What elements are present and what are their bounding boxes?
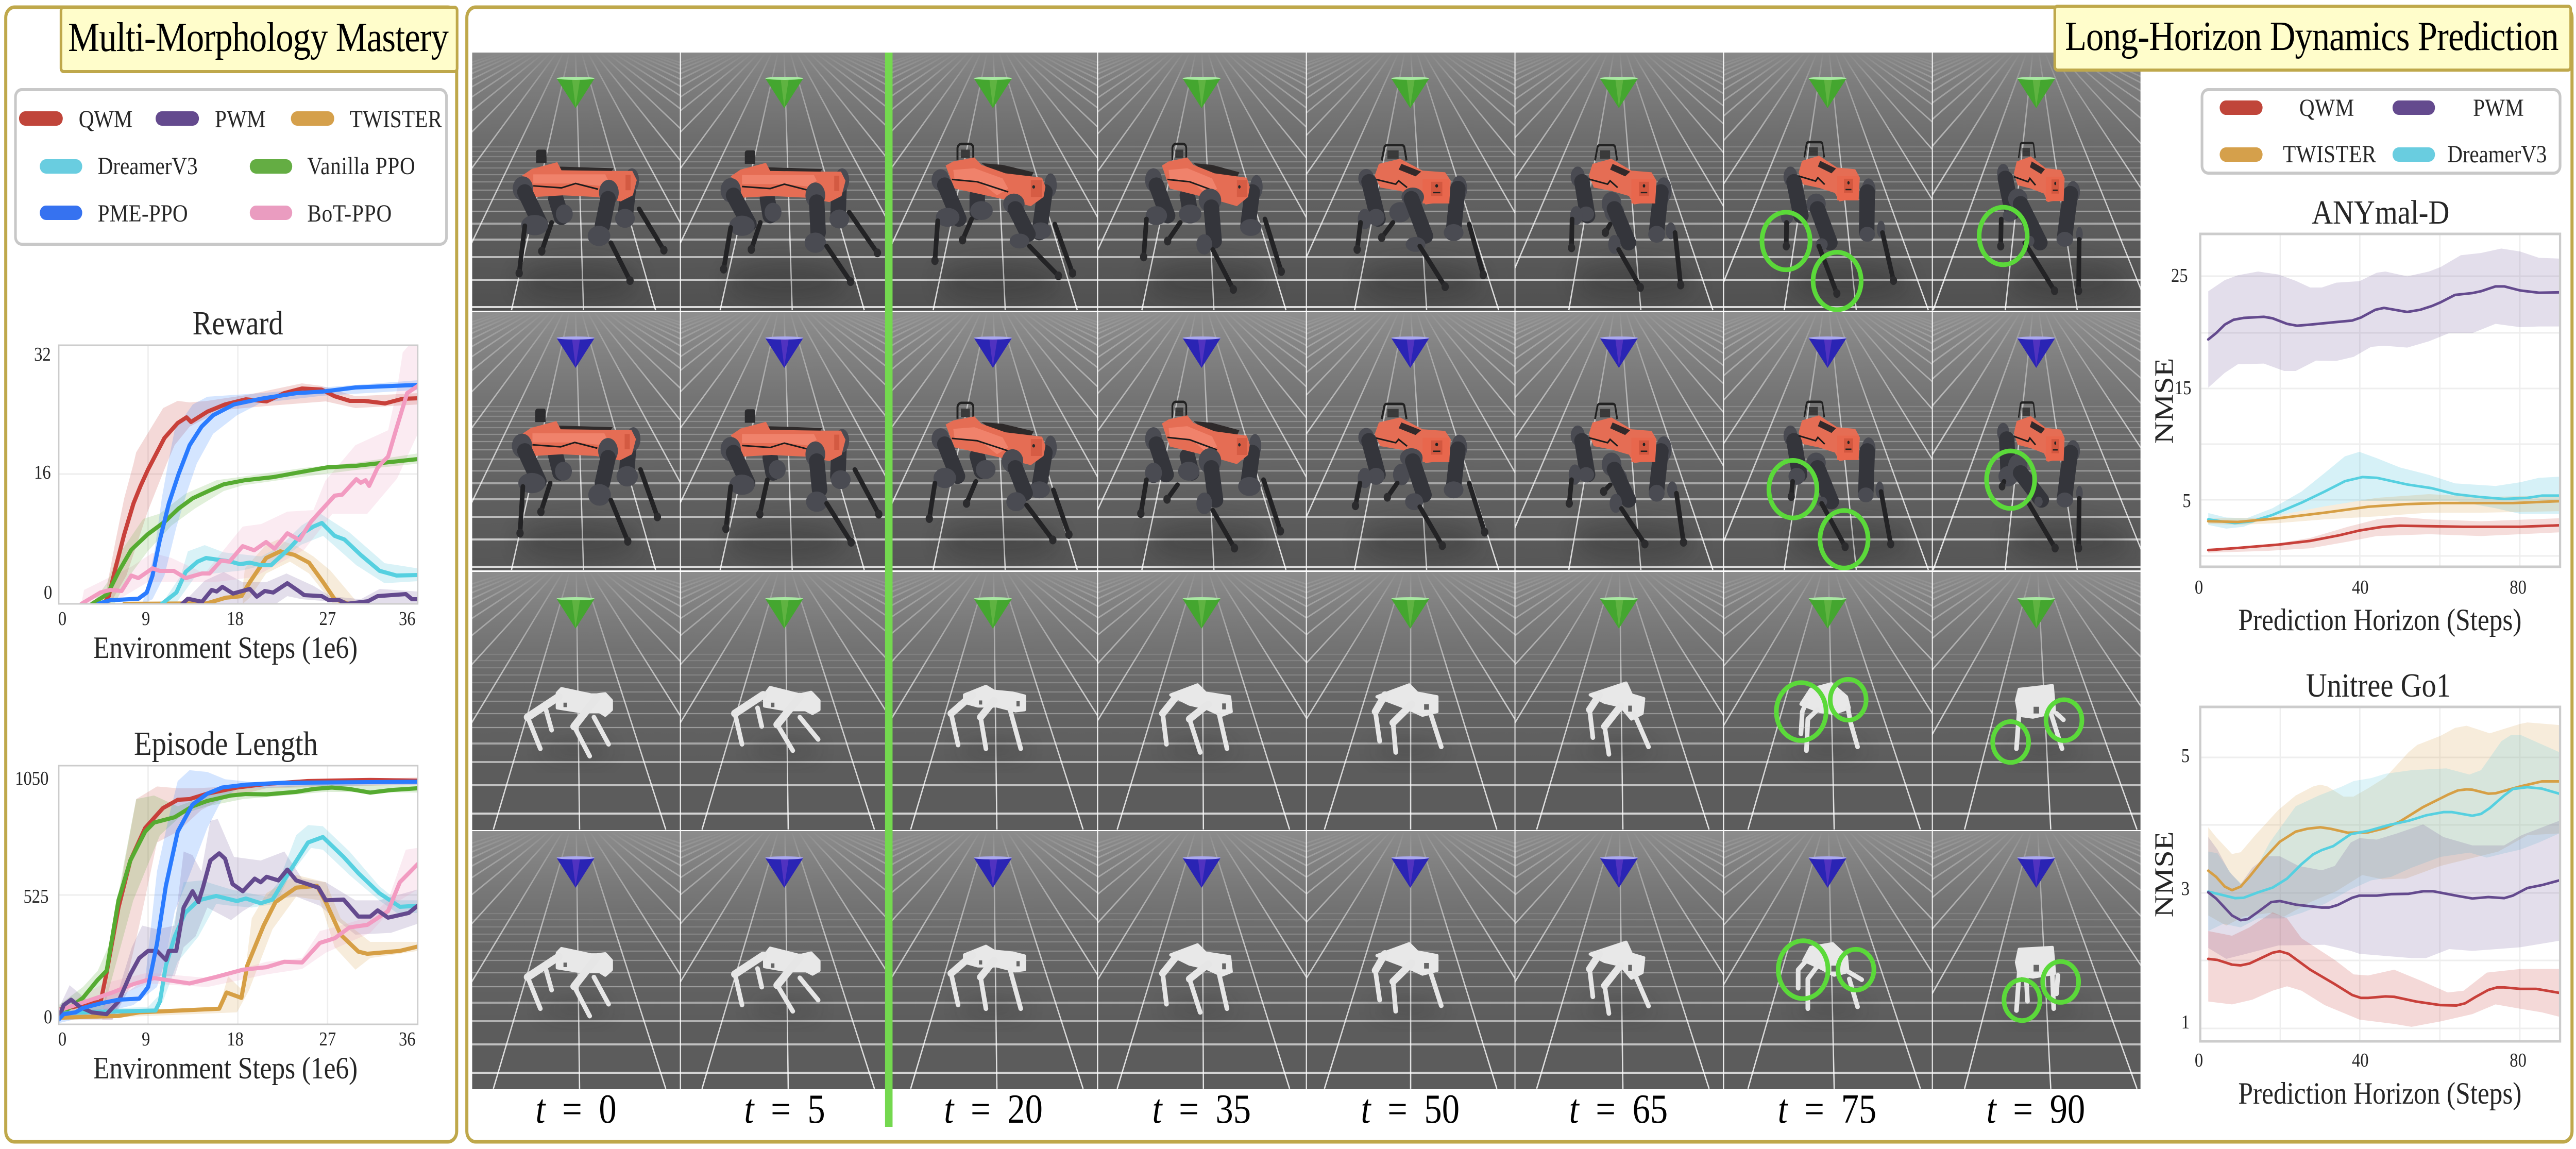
robot: ANYmal row 1 t=75 xyxy=(1781,142,1897,298)
chart: Episode Length: Environment Steps (1e6) xyxy=(93,1051,358,1086)
robot: ANYmal row 2 t=50 xyxy=(1352,404,1488,550)
robot: ANYmal row 2 t=5 xyxy=(721,409,883,547)
chart: Unitree Go1: Unitree Go1 xyxy=(2306,667,2451,704)
robot: Go1 row 3 t=90 xyxy=(2016,686,2063,749)
time labels: t = 65 xyxy=(1569,1087,1668,1132)
robot: Go1 row 4 t=65 xyxy=(1589,942,1649,1013)
frame row 1 t=20 xyxy=(892,53,1097,311)
frame row 1 t=75 xyxy=(1724,53,1932,311)
robots: ANYmal t=20 and t=35 xyxy=(926,144,1285,552)
robot: ANYmal row 1 t=50 xyxy=(1353,145,1487,291)
robot: ANYmal row 2 t=65 xyxy=(1566,404,1687,548)
divider: green context bar xyxy=(885,53,892,1127)
chart: Episode Length: 9 xyxy=(142,1028,150,1050)
robots: ANYmal t=50 and t=65 xyxy=(1352,145,1687,550)
frame row 4 t=5 xyxy=(637,809,933,1089)
chart: Episode Length: 1050 xyxy=(15,767,48,789)
frame row 1 t=50 xyxy=(1307,53,1515,311)
robots: Unitree Go1 t=20 to t=65 xyxy=(951,683,1649,1013)
chart: ANYmal-D: 40 xyxy=(2352,576,2369,598)
chart: Reward: 36 xyxy=(399,607,416,630)
legend: prediction methods: TWISTER xyxy=(2283,140,2376,168)
robot: Go1 row 4 t=50 xyxy=(1376,944,1441,1011)
highlight rings: Go1 deviations xyxy=(1776,679,2082,1021)
chart: ANYmal-D: NMSE xyxy=(2149,358,2179,444)
robot: Go1 row 3 t=65 xyxy=(1589,683,1649,754)
chart: ANYmal-D: 5 xyxy=(2182,489,2191,512)
frame row 3 t=50 xyxy=(1259,550,1559,830)
chart: ANYmal-D xyxy=(2149,194,2560,637)
legend: prediction methods xyxy=(2202,90,2560,173)
time labels: t = 35 xyxy=(1152,1087,1251,1132)
frame row 3 t=65 xyxy=(1471,550,1768,830)
frame row 2 t=0 xyxy=(472,312,680,570)
frame row 2 t=20 xyxy=(845,288,1146,570)
robot: ANYmal row 2 t=20 xyxy=(926,403,1073,544)
chart: Unitree Go1: NMSE xyxy=(2149,832,2179,917)
robot: Go1 row 3 t=50 xyxy=(1376,685,1441,752)
panel: Multi-Morphology Mastery xyxy=(6,7,456,1142)
legend: training methods xyxy=(15,90,447,244)
frame row 2 t=5 xyxy=(681,312,885,570)
robots: ANYmal t=0 and t=5 xyxy=(512,149,883,547)
frame row 4 t=0 xyxy=(428,809,724,1089)
frame row 4 t=75 xyxy=(1680,809,1979,1089)
frame row 3 t=75 xyxy=(1680,550,1979,830)
chart: Reward: 32 xyxy=(34,343,51,365)
robot: Go1 row 4 t=90 xyxy=(2016,948,2058,1010)
time labels: t = 20 xyxy=(944,1087,1043,1132)
frame row 2 t=65 xyxy=(1471,288,1782,570)
frame row 4 t=90 xyxy=(1889,809,2195,1089)
chart: Reward: 18 xyxy=(227,607,244,630)
time labels: t = 90 xyxy=(1987,1087,2085,1132)
legend: prediction methods: PWM xyxy=(2473,94,2524,122)
chart: Unitree Go1 xyxy=(2149,667,2560,1111)
robot: Go1 row 4 t=75 xyxy=(1798,944,1862,1009)
chart: Reward: Environment Steps (1e6) xyxy=(93,631,358,665)
robot: ANYmal row 1 t=5 xyxy=(720,150,881,286)
legend: training methods: Vanilla PPO xyxy=(307,152,415,180)
robot: Go1 row 4 t=35 xyxy=(1163,945,1231,1012)
frame row 3 t=35 xyxy=(1052,550,1350,830)
robots: Unitree Go1 t=0 and t=5 xyxy=(528,687,819,1016)
legend: training methods: PME-PPO xyxy=(98,199,188,227)
chart: Episode Length: 0 xyxy=(44,1006,52,1028)
legend: training methods: BoT-PPO xyxy=(307,199,392,227)
robot: ANYmal row 2 t=75 xyxy=(1784,402,1894,551)
chart: Episode Length: 0 xyxy=(58,1028,66,1050)
legend: training methods: PWM xyxy=(215,105,266,133)
chart: Unitree Go1: 5 xyxy=(2181,745,2190,767)
chart: Unitree Go1: 0 xyxy=(2195,1049,2203,1071)
robot: ANYmal row 2 t=90 xyxy=(1997,402,2083,552)
heading: Multi-Morphology Mastery xyxy=(61,7,457,72)
robot: Go1 row 3 t=20 xyxy=(951,686,1025,749)
robot: Go1 row 3 t=5 xyxy=(735,687,819,751)
time labels xyxy=(535,1087,2085,1132)
frame row 1 t=65 xyxy=(1516,53,1723,311)
robot: ANYmal row 1 t=65 xyxy=(1568,145,1684,292)
chart: ANYmal-D: 80 xyxy=(2510,576,2527,598)
time labels: t = 0 xyxy=(535,1087,617,1132)
legend: prediction methods: QWM xyxy=(2299,94,2354,122)
chart: Episode Length: 36 xyxy=(399,1028,416,1050)
chart: Episode Length: 27 xyxy=(319,1028,336,1050)
chart: ANYmal-D: 0 xyxy=(2195,576,2203,598)
chart: Episode Length: Episode Length xyxy=(134,725,318,763)
robot: ANYmal row 1 t=35 xyxy=(1140,144,1285,294)
robot: Go1 row 3 t=75 xyxy=(1801,684,1858,751)
legend: prediction methods: DreamerV3 xyxy=(2447,140,2547,168)
chart: Reward: 0 xyxy=(44,581,52,603)
highlight rings: ANYmal deviations xyxy=(1762,207,2035,568)
chart: Episode Length xyxy=(15,725,418,1086)
frames: perspective grid floor and target cone cells xyxy=(428,28,2218,1089)
chart: Unitree Go1: 40 xyxy=(2352,1049,2369,1071)
chart: Episode Length: 525 xyxy=(23,885,48,907)
chart: Unitree Go1: 1 xyxy=(2181,1011,2190,1033)
chart: ANYmal-D: 15 xyxy=(2175,377,2191,399)
frame row 3 t=5 xyxy=(637,550,933,830)
robot: ANYmal row 1 t=0 xyxy=(513,149,668,285)
robot: ANYmal row 1 t=90 xyxy=(1997,143,2083,295)
legend: training methods: DreamerV3 xyxy=(98,152,198,180)
robot: ANYmal row 2 t=35 xyxy=(1137,402,1284,552)
robots: Unitree Go1 t=75 and t=90 with highlight rings xyxy=(1776,679,2082,1021)
robot: Go1 row 4 t=5 xyxy=(735,948,819,1011)
time labels: t = 75 xyxy=(1778,1087,1876,1132)
robot: ANYmal row 2 t=0 xyxy=(512,409,661,546)
frame row 2 t=50 xyxy=(1263,288,1567,570)
time labels: t = 5 xyxy=(744,1087,825,1132)
robot: ANYmal row 1 t=20 xyxy=(931,144,1076,280)
chart: Reward: 0 xyxy=(58,607,66,630)
legend: training methods: TWISTER xyxy=(350,105,442,133)
robot: Go1 row 4 t=0 xyxy=(528,949,612,1016)
chart: Episode Length: 18 xyxy=(227,1028,244,1050)
time labels: t = 50 xyxy=(1361,1087,1460,1132)
chart: Reward: 27 xyxy=(319,607,336,630)
frame row 3 t=20 xyxy=(845,550,1142,830)
frame row 3 t=90 xyxy=(1889,550,2195,830)
frame row 3 t=0 xyxy=(428,550,724,830)
frame row 2 t=35 xyxy=(1054,288,1354,570)
heading: Long-Horizon Dynamics Prediction xyxy=(2055,6,2571,70)
chart: Reward: Reward xyxy=(193,305,283,342)
robot: Go1 row 3 t=35 xyxy=(1163,685,1231,752)
chart: ANYmal-D: ANYmal-D xyxy=(2312,194,2449,231)
chart: Unitree Go1: Prediction Horizon (Steps) xyxy=(2238,1076,2521,1111)
robot: Go1 row 4 t=20 xyxy=(951,947,1025,1009)
heading: Multi-Morphology Mastery: Multi-Morphology Mastery xyxy=(68,15,449,60)
chart: Unitree Go1: 80 xyxy=(2510,1049,2527,1071)
chart: Unitree Go1: 3 xyxy=(2181,877,2190,900)
chart: Reward xyxy=(34,305,418,665)
frame row 4 t=35 xyxy=(1052,809,1350,1089)
heading: Long-Horizon Dynamics Prediction: Long-Horizon Dynamics Prediction xyxy=(2065,14,2559,59)
frame row 1 t=90 xyxy=(1933,53,2141,311)
frame row 1 t=35 xyxy=(1098,53,1306,311)
chart: Reward: 9 xyxy=(142,607,150,630)
robot: Go1 row 3 t=0 xyxy=(528,688,612,756)
frame row 4 t=50 xyxy=(1259,809,1559,1089)
frame row 2 t=90 xyxy=(1889,288,2218,570)
chart: ANYmal-D: 25 xyxy=(2171,264,2188,286)
robots: ANYmal t=75 and t=90 with highlight rings xyxy=(1762,142,2083,568)
chart: Reward: 16 xyxy=(34,461,51,483)
frame row 4 t=65 xyxy=(1471,809,1768,1089)
frame row 1 t=5 xyxy=(681,53,885,311)
legend: training methods: QWM xyxy=(79,105,132,133)
frame row 4 t=20 xyxy=(845,809,1142,1089)
frame row 2 t=75 xyxy=(1680,288,1997,570)
frame row 1 t=0 xyxy=(472,53,680,311)
chart: ANYmal-D: Prediction Horizon (Steps) xyxy=(2238,603,2521,637)
